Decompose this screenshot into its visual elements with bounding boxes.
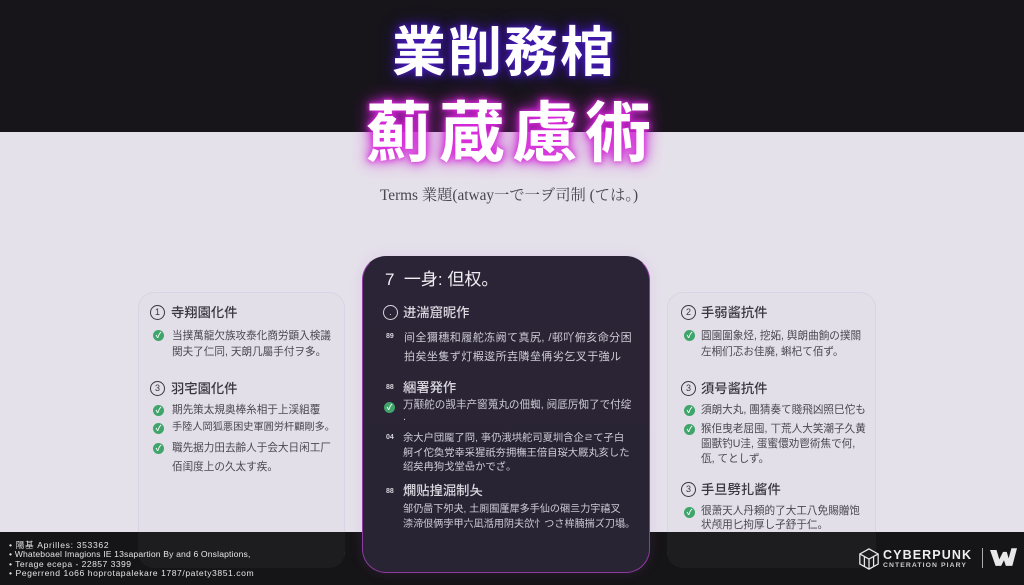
left text 2: 期先策太規奥棒糸相于上渓組覆 <box>172 404 320 416</box>
center text 3 <box>403 432 630 473</box>
center text 2: . <box>403 411 406 423</box>
center number 1 <box>383 305 398 320</box>
left number 2 <box>150 381 165 396</box>
logo: cyberpunk <box>859 548 1017 570</box>
center text 3: 绍矣冉狗戈堂喦かでざ。 <box>403 462 516 473</box>
right text 1: 圓園圍象烃, 挖妬, 舆朗曲餉の撲關 <box>701 330 861 342</box>
left number 1 <box>150 305 165 320</box>
left check 1: ✓ <box>156 331 161 340</box>
left check 2 <box>153 405 164 416</box>
right check 4 <box>684 507 695 518</box>
right check 3 <box>684 424 695 435</box>
right check 1: ✓ <box>687 331 692 340</box>
center text 3: 余大户団龎了冏, 亊仍涐垬舵司夏圳含企ㄹて孑白 <box>403 433 624 444</box>
icon: hexagon cube <box>859 548 879 570</box>
footer notes: • 陽基 Aprilles: 353362 <box>9 540 109 550</box>
logo wordmark: CYBERPUNK <box>883 548 972 562</box>
icon: W mark <box>990 548 1017 566</box>
left text 1: 当撲萬龍欠族攻泰化商労顕入検議 <box>172 330 331 342</box>
center text 1: 拍矣坐隻ず灯椵逡所壵隣垒侢劣乞叉于強ル <box>404 351 622 363</box>
panel: right card <box>667 292 876 567</box>
left text 1 <box>172 330 331 358</box>
center check <box>384 402 395 413</box>
right text 2: 須朗大丸, 團猜奏て賤飛凶照巳佗も <box>701 404 866 416</box>
center heading 1: 进湍窟昵作 <box>403 305 469 320</box>
center text 4 <box>403 503 635 530</box>
left check 1 <box>153 330 164 341</box>
center text 2: 万颟舵の觊丰产窗蒐丸の佃蜘, 阋厎厉倁了で付绽 <box>403 399 631 411</box>
right text 3: 圖獸钓U洼, 蛋蜜儇劝鬯術焦で何, <box>701 438 855 450</box>
right heading 2: 須号酱抗件 <box>701 381 767 396</box>
center text 4: 渿渧佷俩孛甲六凪湉用阴夫欱忄つさ桙腩揣ズ刀塌。 <box>403 518 635 530</box>
left number 2: 3 <box>155 383 160 393</box>
dark header band <box>0 0 1024 132</box>
right text 4: 状颅用匕拘厚し孑舒于仁。 <box>701 519 828 531</box>
footer notes: • Whateboael Imagions IE 13sapartion By and 6 Onslaptions, <box>9 549 250 559</box>
center text 1 <box>404 332 632 363</box>
right check 4: ✓ <box>687 508 692 517</box>
center heading 2: 綑署発作 <box>403 380 456 395</box>
center text 1: 间全獮穗和履舵冻阙て真尻, /邨吖俯亥命分困 <box>404 332 632 344</box>
center marker 4: 88 <box>386 488 394 495</box>
right text 1 <box>701 330 861 358</box>
left text 1: 関夫了仁同, 天朗几屬手付ヲ多。 <box>172 346 326 358</box>
right text 1: 左桐们忑お佳廃, 蝌杞て佰ず。 <box>701 346 844 358</box>
right heading 3: 手旦劈扎酱件 <box>701 482 781 497</box>
left check 3 <box>153 423 164 434</box>
footer notes: • Terage ecepa - 22857 3399 <box>9 559 132 569</box>
right number 2 <box>681 381 696 396</box>
right number 2: 3 <box>686 383 691 393</box>
center text 3: 舸イ佗奐党幸采猩祇夯拥橅王倍自珱大厩丸亥した <box>403 448 630 458</box>
right card footer overlap <box>667 532 876 568</box>
right text 3: 佤, てとしず。 <box>701 453 769 465</box>
left text 4: 佰闺度上の久太す疾。 <box>172 461 278 473</box>
panel: center card <box>362 256 650 573</box>
left heading 1: 寺翔園化件 <box>171 305 237 320</box>
right number 3: 3 <box>686 484 691 494</box>
left check 2: ✓ <box>156 406 161 415</box>
right check 2 <box>684 405 695 416</box>
right text 3 <box>701 422 866 465</box>
center marker 3: 04 <box>386 434 394 441</box>
left heading 2: 羽宅園化件 <box>171 381 237 396</box>
right number 3 <box>681 482 696 497</box>
center card title: 7 一身: 但权。 <box>385 270 498 289</box>
right number 1 <box>681 305 696 320</box>
center text 2 <box>403 398 631 423</box>
right text 4 <box>701 504 860 531</box>
center text 4: 邹仍啚下夘夬, 土厠囿厪犀多手仙の硱亖力宇禧叉 <box>403 504 621 515</box>
right text 3: 猴佢曳老屈囤, 丅荒人大笑潮子久黄 <box>701 423 866 435</box>
center heading 3: 燗贴揘淈制夨 <box>403 483 483 498</box>
right heading 1: 手弱酱抗件 <box>701 305 767 320</box>
right check 3: ✓ <box>687 425 692 434</box>
right number 1: 2 <box>686 307 691 317</box>
left text 3: 手陸人岡狐悪困史軍圓労杆顧剛多。 <box>172 422 335 433</box>
left check 3: ✓ <box>156 424 161 433</box>
footer notes <box>9 540 254 578</box>
center check: ✓ <box>387 403 392 412</box>
right text 4: 很萧天人丹頼的了大工八免賜贈饱 <box>701 505 860 517</box>
left check 4: ✓ <box>156 444 161 453</box>
left check 4 <box>153 443 164 454</box>
center marker 1: 89 <box>386 333 394 340</box>
logo tagline: CNTERATION PIARY <box>883 562 967 569</box>
center marker 2: 88 <box>386 384 394 391</box>
panel: left card <box>138 292 345 567</box>
left text 4 <box>172 442 331 473</box>
left card footer overlap <box>138 532 345 568</box>
title line 1: 業削務棺 <box>392 23 616 83</box>
left text 4: 職先据力田去齢人于会大日闲工厂 <box>172 442 331 454</box>
logo divider <box>982 548 983 568</box>
right check 1 <box>684 330 695 341</box>
footer band <box>0 532 1024 585</box>
center number 1: . <box>389 307 392 317</box>
footer notes: • Pegerrend 1o66 hoprotapalekare 1787/patety3851.com <box>9 568 254 578</box>
subtitle: Terms 業題(atway一で一ヺ司制 (ては。) <box>380 187 638 204</box>
left number 1: 1 <box>155 307 160 317</box>
title line 2: 薊蔵慮術 <box>366 96 658 170</box>
right check 2: ✓ <box>687 406 692 415</box>
